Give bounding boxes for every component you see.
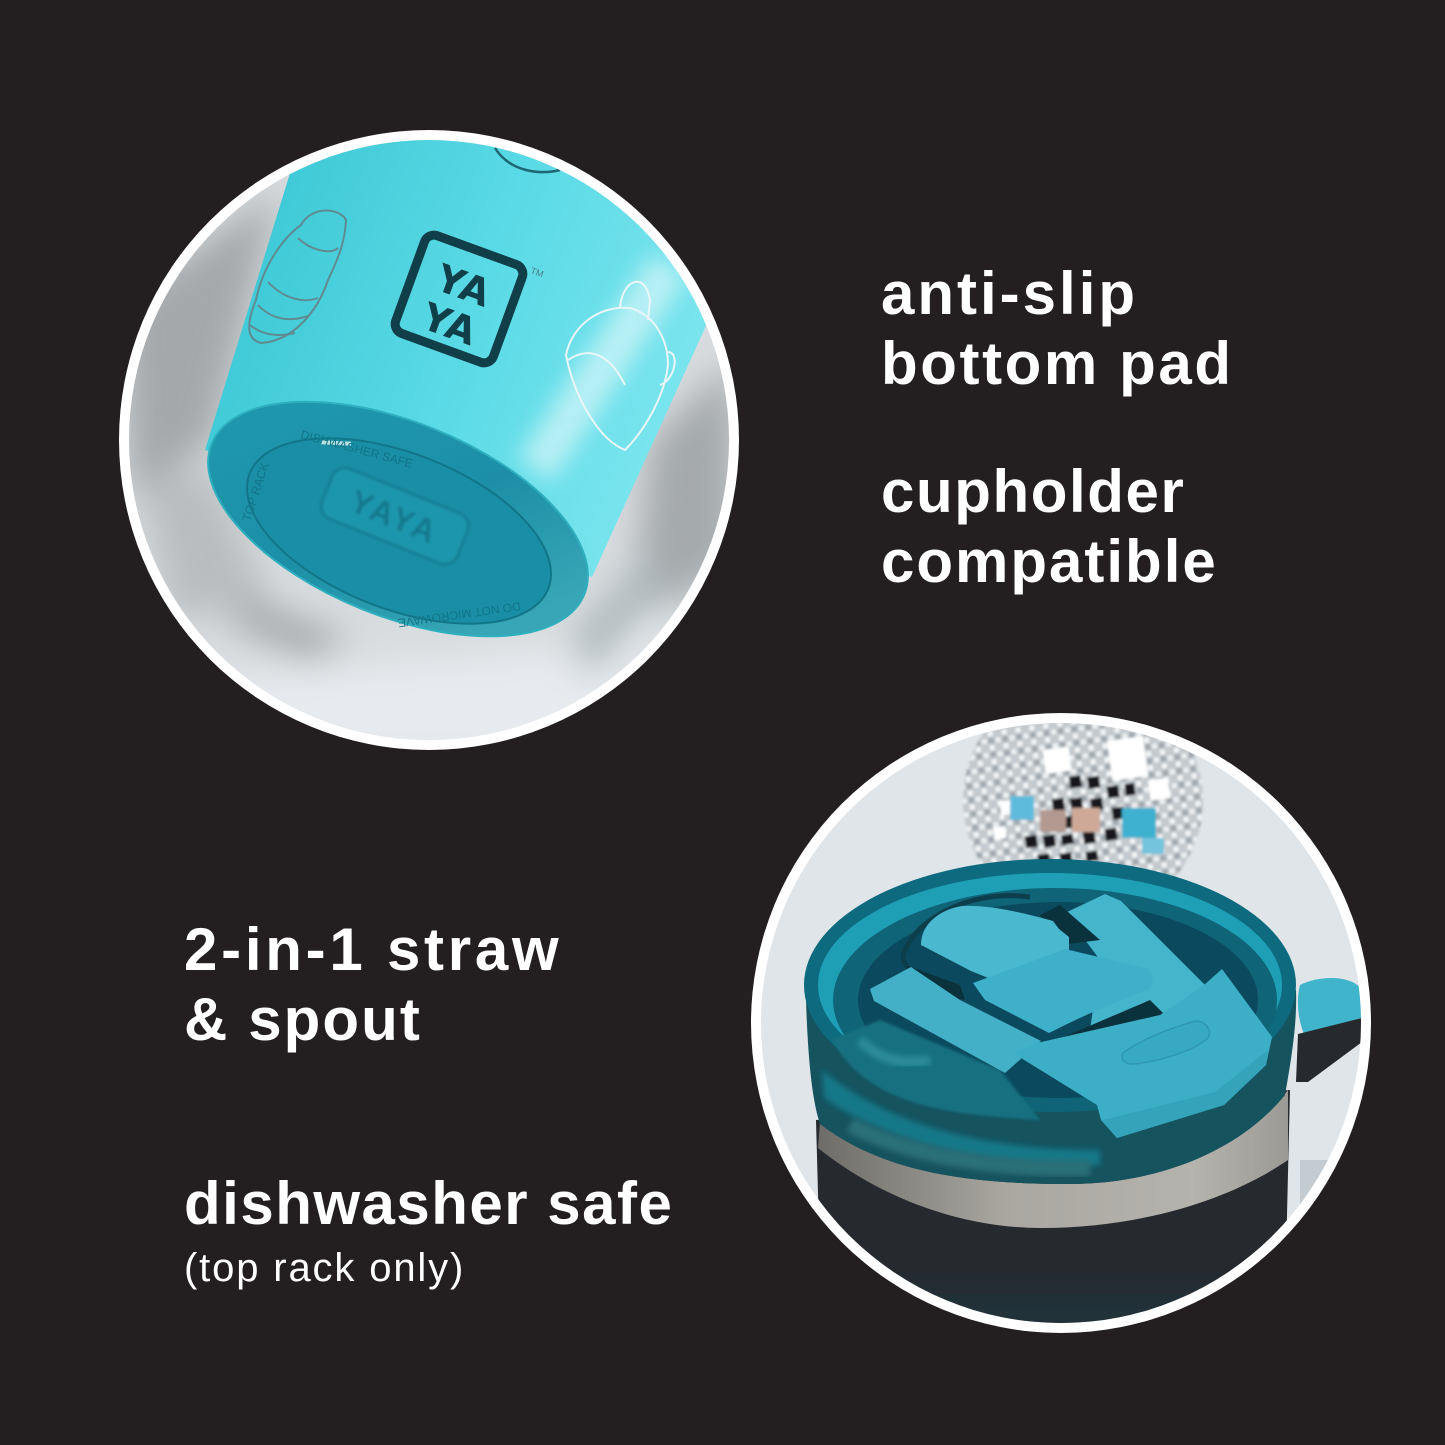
text: cupholder compatible — [881, 458, 1218, 595]
handle — [1296, 1018, 1362, 1082]
text: cupholder compatible: cupholder — [881, 458, 1185, 525]
lid side glass — [806, 990, 1296, 1184]
cup body — [205, 140, 706, 577]
base raised text: TOP RACK — [240, 461, 272, 523]
text: 2-in-1 straw and spout — [184, 916, 562, 1053]
trademark: TM — [529, 265, 545, 279]
left paddle — [870, 967, 1041, 1073]
middle paddle — [973, 949, 1100, 1033]
handle tab — [1298, 978, 1362, 1034]
slider button — [1122, 1021, 1210, 1064]
engraved caterpillar character — [249, 210, 346, 343]
text: top rack only: (top rack only) — [184, 1246, 465, 1290]
cup base inner disc — [246, 437, 552, 625]
right edge of table — [1300, 1160, 1328, 1204]
text: cupholder compatible: compatible — [881, 528, 1218, 595]
mug body — [816, 1090, 1290, 1340]
text: 2-in-1 straw and spout: & spout — [184, 986, 422, 1053]
silver band — [818, 1090, 1288, 1228]
lid rim highlight — [818, 873, 1282, 1036]
disco ball — [962, 723, 1204, 876]
base raised text: DISHWASHER SAFE — [299, 427, 414, 471]
base highlight — [321, 440, 351, 446]
text: anti-slip bottom pad — [881, 260, 1234, 397]
wire loop — [903, 896, 1030, 972]
text: anti-slip bottom pad: anti-slip — [881, 260, 1138, 327]
base embossed logo — [317, 464, 473, 569]
slider arm — [1065, 894, 1210, 1030]
base embossed logo: YAYA — [345, 483, 444, 551]
text: anti-slip bottom pad: bottom pad — [881, 330, 1234, 397]
cup logo: YA — [429, 255, 497, 316]
dark gaps — [906, 905, 1163, 1037]
cup base rim — [207, 400, 589, 638]
engraved bear character — [566, 282, 675, 450]
text: dishwasher safe: dishwasher safe — [184, 1170, 673, 1237]
lid rim — [804, 859, 1296, 1048]
base raised text: DO NOT MICROWAVE — [397, 599, 522, 630]
lid recess — [833, 888, 1277, 1112]
cup logo — [392, 232, 526, 366]
upper paddle — [921, 906, 1069, 983]
cup logo: YA — [415, 294, 483, 355]
text: 2-in-1 straw and spout: 2-in-1 straw — [184, 916, 562, 983]
cup highlight — [535, 265, 670, 470]
top arc — [495, 148, 560, 172]
base raised text — [240, 427, 522, 630]
photo circle: lid and straw spout — [750, 680, 1380, 1340]
photo circle: anti-slip cup bottom — [110, 120, 770, 760]
front slider — [1013, 969, 1272, 1138]
